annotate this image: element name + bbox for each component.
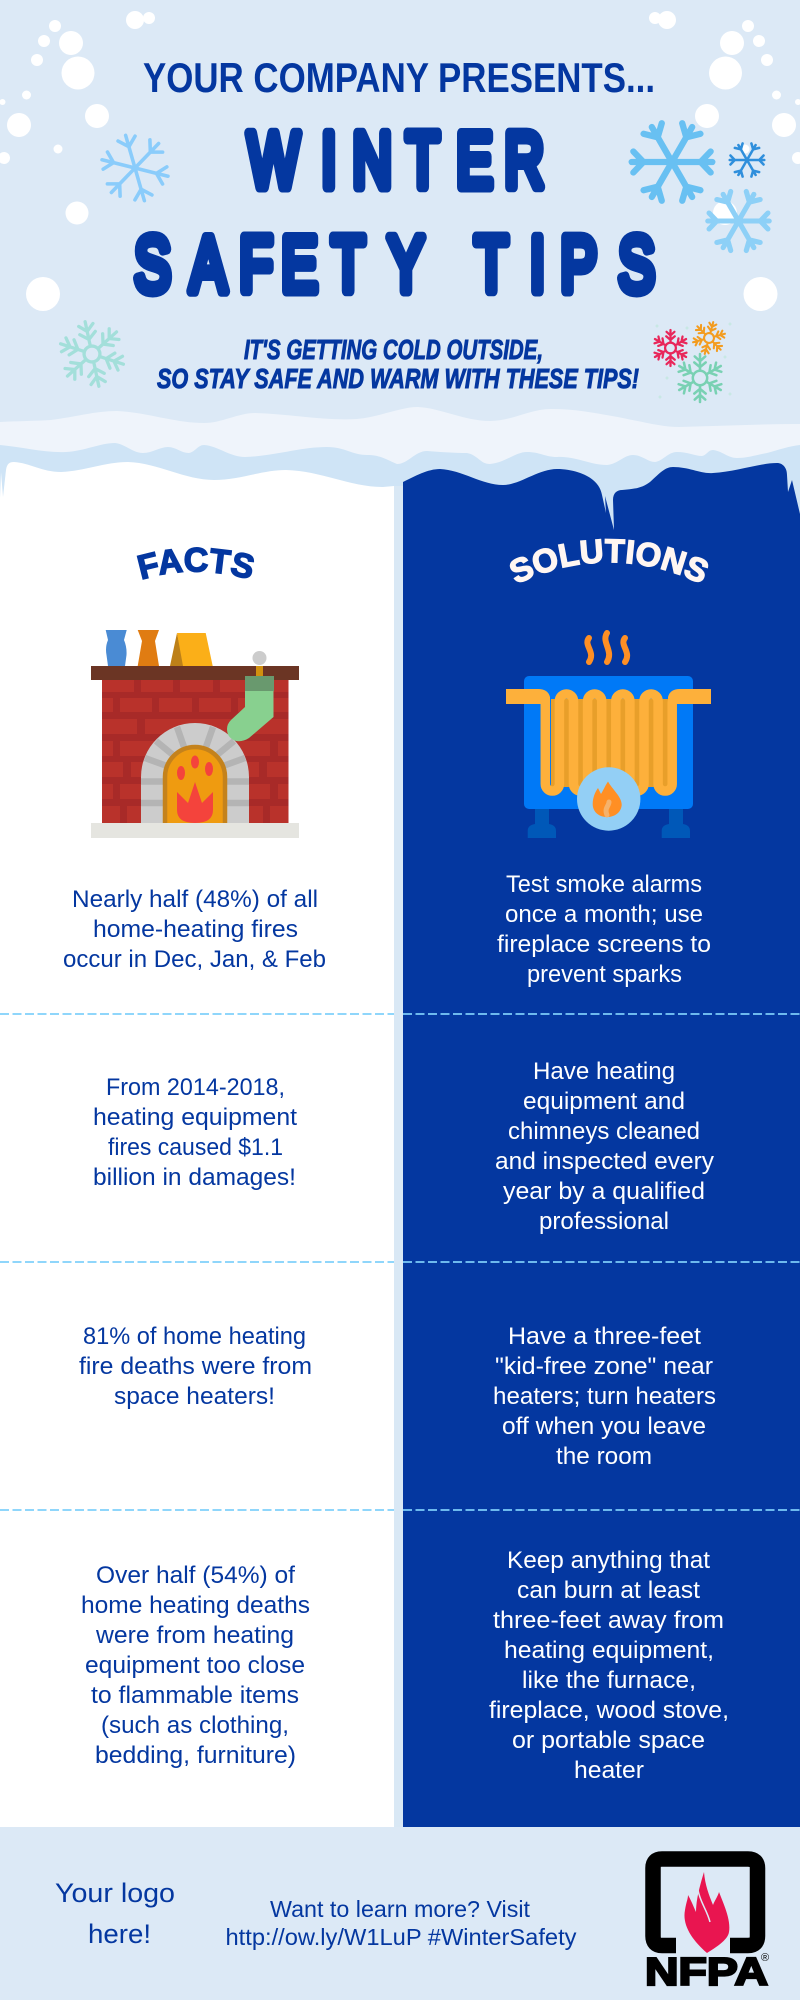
text: fact 1 (63, 886, 326, 973)
text: fact 1: occur in Dec, Jan, & Feb (63, 946, 326, 973)
icon: green snowflake (676, 354, 724, 402)
text: solution 2: professional (539, 1208, 669, 1235)
text: fact 4: home heating deaths (81, 1592, 310, 1619)
text: fact 2: billion in damages! (93, 1164, 296, 1191)
title: safety tips: SAFETY TIPS (134, 221, 655, 308)
text: fact 3: fire deaths were from (79, 1353, 312, 1380)
snowballs (0, 11, 800, 311)
text: solution 2: Have heating (533, 1058, 675, 1085)
subtitle line 2: SO STAY SAFE AND WARM WITH THESE TIPS! (157, 363, 639, 394)
vases and book on mantel (106, 630, 213, 666)
stone arch (141, 723, 249, 823)
divider row 3 (0, 1509, 800, 1511)
stocking (227, 651, 274, 741)
text: solution 1: once a month; use (505, 901, 703, 928)
text: solution 3 (493, 1323, 716, 1470)
text: solution 3: off when you leave (502, 1413, 706, 1440)
icon: teal snowflake (51, 313, 133, 395)
heading: solutions: SOLUTIONS (510, 538, 708, 582)
snow layer: pale drift (0, 407, 800, 540)
title: winter: WINTER (248, 117, 544, 204)
footer: learn more text: Want to learn more? Visit (270, 1896, 531, 1922)
divider row 1 (0, 1013, 800, 1015)
text: solution 3: heaters; turn heaters (493, 1383, 716, 1410)
text: solution 4: Keep anything that (507, 1547, 710, 1574)
text: fact 4: Over half (54%) of (96, 1562, 295, 1589)
text: fact 1: home-heating fires (93, 916, 298, 943)
firebox (165, 747, 225, 823)
text: solution 4: like the furnace, (522, 1667, 696, 1694)
text: fact 2: heating equipment (93, 1104, 297, 1131)
text: solution 2: equipment and (523, 1088, 685, 1115)
icon: fireplace (91, 630, 299, 838)
text: solution 4: three-feet away from (493, 1607, 724, 1634)
text: solution 2 (495, 1058, 714, 1235)
text: fact 4: to flammable items (91, 1682, 299, 1709)
steam (587, 633, 627, 662)
text: solution 4: can burn at least (517, 1577, 700, 1604)
text: fact 3 (79, 1323, 312, 1410)
faint dots around small snowflakes (656, 322, 732, 398)
heading: your company presents: YOUR COMPANY PRESENTS... (143, 54, 655, 101)
panel: gap column (394, 486, 403, 1827)
text: solution 1: Test smoke alarms (506, 871, 702, 898)
coil (538, 694, 679, 791)
heading: facts (136, 547, 254, 580)
logo: NFPA: ® (761, 1952, 769, 1964)
flames (177, 756, 213, 823)
text: solution 4: fireplace, wood stove, (489, 1697, 729, 1724)
logo: NFPA (645, 1859, 769, 1994)
footer: learn more text: http://ow.ly/W1LuP #WinterSafety (226, 1924, 577, 1950)
text: solution 3: "kid-free zone" near (495, 1353, 713, 1380)
subtitle line 1: IT'S GETTING COLD OUTSIDE, (244, 334, 543, 365)
text: fact 4 (81, 1562, 310, 1769)
text: solution 1: prevent sparks (527, 961, 682, 988)
text: solution 3: the room (556, 1443, 652, 1470)
text: solution 3: Have a three-feet (508, 1323, 701, 1350)
footer: learn more text (226, 1896, 577, 1950)
text: solution 2: and inspected every (495, 1148, 714, 1175)
icon: big blue snowflake (632, 122, 712, 202)
text: solution 1: fireplace screens to (497, 931, 711, 958)
text: fact 3: space heaters! (114, 1383, 275, 1410)
text: solution 4: heater (574, 1757, 644, 1784)
text: fact 4: equipment too close (85, 1652, 305, 1679)
icon: radiator (506, 633, 711, 838)
icon: light blue snowflake left (94, 127, 176, 209)
heading: facts: FACTS (136, 547, 254, 580)
legs (528, 809, 690, 838)
panel: solutions column (403, 463, 800, 1827)
icon: pale blue snowflake (708, 190, 769, 252)
text: solution 2: year by a qualified (503, 1178, 705, 1205)
logo: NFPA: NFPA (645, 1951, 768, 1994)
text: solution 4 (489, 1547, 729, 1784)
text: fact 1: Nearly half (48%) of all (72, 886, 318, 913)
panel: facts column (0, 462, 394, 1827)
footer: your logo placeholder (55, 1878, 175, 1949)
icon: orange snowflake (689, 318, 729, 358)
text: fact 2: From 2014-2018, (106, 1074, 285, 1101)
text: solution 4: or portable space (512, 1727, 705, 1754)
text: solution 2: chimneys cleaned (508, 1118, 700, 1145)
footer: your logo placeholder: Your logo (55, 1878, 175, 1908)
text: solution 1 (497, 871, 711, 988)
icon: small dark blue snowflake (730, 143, 764, 177)
text: fact 4: (such as clothing, (101, 1712, 289, 1739)
text: fact 2: fires caused $1.1 (108, 1134, 283, 1161)
text: fact 2 (93, 1074, 297, 1191)
footer: your logo placeholder: here! (88, 1919, 151, 1949)
divider row 2 (0, 1261, 800, 1263)
icon: red snowflake (653, 330, 688, 366)
burner circle (577, 767, 640, 831)
text: fact 4: were from heating (95, 1622, 294, 1649)
text: solution 4: heating equipment, (504, 1637, 714, 1664)
text: fact 3: 81% of home heating (83, 1323, 306, 1350)
text: fact 4: bedding, furniture) (95, 1742, 296, 1769)
snow layer: light blue band (0, 443, 800, 540)
